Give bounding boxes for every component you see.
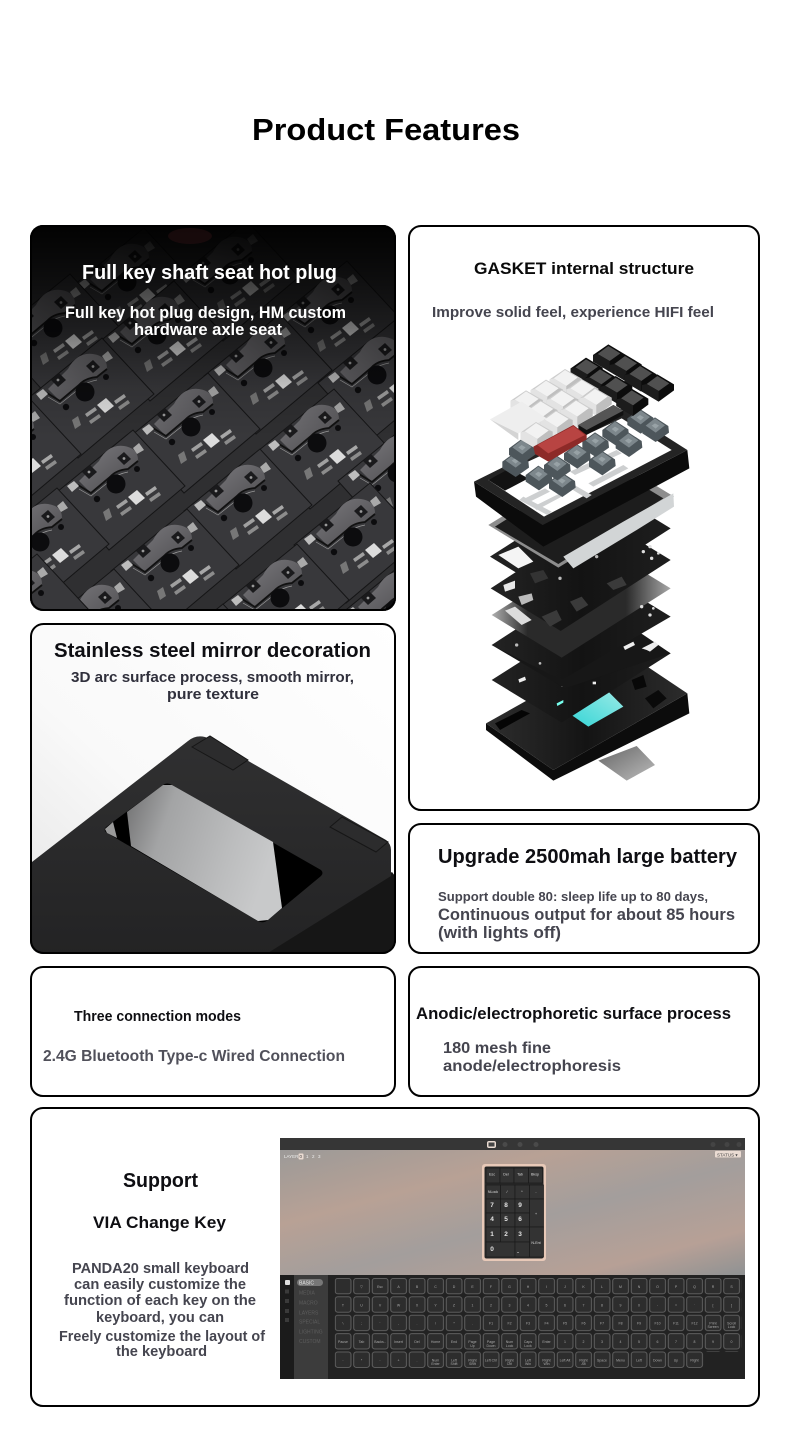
panel: hot plug shaft seat (30, 225, 396, 611)
keycode grid: J (564, 1285, 566, 1289)
keycode grid: Y (434, 1304, 437, 1308)
numpad preview: 9 (518, 1202, 522, 1209)
keycode grid: F10 (654, 1322, 661, 1326)
keycode grid: D (453, 1285, 456, 1289)
keycode grid: Win (525, 1362, 531, 1366)
keycode grid: 7 (583, 1304, 585, 1308)
numpad preview: - (535, 1190, 537, 1194)
numpad preview: 8 (504, 1202, 508, 1209)
keycode grid: M (619, 1285, 622, 1289)
numpad preview: 3 (518, 1231, 522, 1238)
numpad preview: 7 (490, 1202, 494, 1209)
keycode grid: Lock (506, 1344, 513, 1348)
numpad preview (482, 1164, 546, 1261)
keycode grid: F11 (673, 1322, 679, 1326)
keycode grid: Enter (431, 1362, 441, 1366)
text block: Full key hot plug design, HM custom (65, 303, 346, 322)
panel: stainless steel mirror (28, 623, 398, 956)
keycode grid: Q (693, 1285, 696, 1289)
text block (65, 303, 346, 339)
heading: Upgrade 2500mah large battery (438, 846, 738, 868)
layer selector: 0 (300, 1154, 302, 1159)
panel: surface process (409, 967, 759, 1096)
keycode grid: . (417, 1322, 418, 1326)
keycode grid: W (397, 1304, 401, 1308)
text block: Improve solid feel, experience HIFI feel (432, 305, 714, 321)
stacked plates (490, 486, 671, 723)
keycode grid: T (342, 1304, 345, 1308)
keycode grid: 8 (601, 1304, 603, 1308)
numpad preview: Esc (489, 1172, 495, 1176)
keycode grid: F9 (637, 1322, 641, 1326)
keycode grid: Enter (542, 1340, 552, 1344)
heading: Three connection modes (74, 1009, 241, 1025)
text block (71, 669, 354, 703)
sidebar (280, 1275, 328, 1379)
keycode grid: F7 (600, 1322, 604, 1326)
text block: 180 mesh fine (443, 1040, 551, 1057)
panel: VIA support (31, 1108, 759, 1406)
heading: Stainless steel mirror decoration (54, 640, 371, 662)
keycode grid: Left (636, 1358, 642, 1362)
sidebar: SPECIAL (299, 1320, 320, 1326)
keycode grid: G (508, 1285, 511, 1289)
text block (59, 1261, 265, 1360)
keycode grid: Ctrl (507, 1362, 512, 1366)
numpad preview: 2 (504, 1231, 508, 1238)
keycode grid: V (379, 1304, 382, 1308)
numpad preview: 6 (518, 1216, 522, 1223)
app canvas (280, 1150, 745, 1275)
text block: 2.4G Bluetooth Type-c Wired Connection (43, 1048, 345, 1065)
keycode grid: Del (414, 1340, 420, 1344)
panel: connection modes (31, 967, 395, 1096)
keycode grid: F (490, 1285, 492, 1289)
heading: Anodic/electrophoretic surface process (416, 1004, 731, 1023)
keycode grid: 8 (694, 1340, 696, 1344)
keycode grid: 9 (712, 1340, 714, 1344)
keycode grid: [ (713, 1304, 714, 1308)
keycode grid: Insert (394, 1340, 403, 1344)
keycode grid: 7 (675, 1340, 677, 1344)
keycode grid: ] (731, 1304, 732, 1308)
keycode grid: \ (343, 1322, 344, 1326)
layer selector: LAYER (284, 1154, 299, 1159)
switches (526, 466, 552, 490)
subheading: VIA Change Key (93, 1213, 227, 1232)
keycode grid (335, 1278, 744, 1371)
keycode grid: Lock (728, 1325, 735, 1329)
keycode grid: ▽ (360, 1285, 364, 1289)
keycode grid: H (527, 1285, 530, 1289)
app top bar (280, 1138, 745, 1150)
text block: hardware axle seat (134, 320, 282, 339)
keycode grid: Caps (524, 1340, 532, 1344)
frame (474, 450, 689, 547)
sidebar: LIGHTING (299, 1330, 323, 1336)
keycode grid: F2 (507, 1322, 512, 1326)
numpad preview: + (535, 1212, 537, 1216)
keycode grid: Right (579, 1358, 588, 1362)
title: Product Features (252, 112, 520, 147)
keycode grid: Left (525, 1358, 531, 1362)
status dropdown: STATUS ▾ (717, 1152, 738, 1157)
keycode grid: R (712, 1285, 715, 1289)
keycode grid: N (638, 1285, 641, 1289)
keycode grid: Right (505, 1358, 514, 1362)
keycode grid: K (582, 1285, 585, 1289)
keycode grid: 3 (509, 1304, 511, 1308)
heading: Support (123, 1170, 198, 1192)
keycode grid: Home (431, 1340, 440, 1344)
sidebar: MACRO (299, 1300, 318, 1306)
keycode grid: Up (674, 1358, 678, 1362)
keycode grid: - (342, 1358, 344, 1362)
keycode grid: Esc (377, 1285, 383, 1289)
text block: Continuous output for about 85 hours (438, 906, 735, 924)
numpad preview: * (521, 1190, 523, 1194)
layer selector: 1 (306, 1154, 309, 1159)
keycode grid: Z (453, 1304, 456, 1308)
heading: GASKET internal structure (474, 259, 694, 278)
text block (443, 1040, 621, 1075)
keycode grid: I (546, 1285, 547, 1289)
keycode grid: 4 (527, 1304, 529, 1308)
keycode grid: Down (487, 1344, 496, 1348)
panel: GASKET internal structure (409, 226, 759, 810)
keycode grid: 9 (620, 1304, 622, 1308)
image: PCB sockets (30, 225, 396, 611)
heading: Full key shaft seat hot plug (82, 262, 337, 284)
keycode grid: F1 (489, 1322, 493, 1326)
keycode grid: Down (653, 1358, 662, 1362)
keycode grid: F8 (618, 1322, 623, 1326)
layer selector (284, 1154, 321, 1160)
keycode grid: / (435, 1322, 436, 1326)
keycode grid: U (360, 1304, 363, 1308)
keycode grid: X (416, 1304, 419, 1308)
keycode grid: B (416, 1285, 419, 1289)
keycode grid: = (675, 1304, 677, 1308)
keycode grid: Backs.. (374, 1340, 386, 1344)
keycode grid: 0 (731, 1340, 733, 1344)
keycode grid: F12 (691, 1322, 698, 1326)
keycode grid: F5 (563, 1322, 567, 1326)
keycode grid: Num (432, 1358, 439, 1362)
keycaps (593, 344, 625, 372)
panel: battery (409, 824, 759, 953)
text block: pure texture (167, 686, 259, 703)
keycode grid: Up (470, 1344, 475, 1348)
keycode grid: 6 (564, 1304, 566, 1308)
keycode grid: Scroll (727, 1322, 736, 1326)
keycode grid: Screen (707, 1325, 719, 1329)
text block: Support double 80: sleep life up to 80 days, (438, 889, 708, 904)
keycode grid: . (417, 1358, 418, 1362)
keycode grid: Left Ctrl (485, 1358, 497, 1362)
sidebar: MEDIA (299, 1290, 316, 1296)
keycode grid: Win (543, 1362, 550, 1366)
keycode grid: Right (690, 1358, 699, 1362)
sidebar: LAYERS (299, 1310, 319, 1316)
numpad preview: . (517, 1248, 519, 1255)
numpad preview: Tab (517, 1172, 523, 1176)
keycode grid: 0 (638, 1304, 640, 1308)
keycode grid: ; (361, 1322, 362, 1326)
keycode grid: Menu (616, 1358, 625, 1362)
layer selector: 2 (312, 1154, 315, 1159)
keycode grid: , (398, 1322, 399, 1326)
keycode grid: Lock (524, 1344, 532, 1348)
numpad preview: 4 (490, 1216, 494, 1223)
keycode grid: P (675, 1285, 678, 1289)
keycode grid: Num (506, 1340, 513, 1344)
numpad preview: Del (503, 1172, 509, 1176)
numpad preview: / (506, 1190, 508, 1194)
sidebar: BASIC (299, 1280, 314, 1286)
text block: the keyboard (116, 1344, 207, 1360)
numpad preview: Bksp (531, 1172, 539, 1176)
keycode grid: Right (468, 1358, 477, 1362)
keycode grid: 6 (657, 1340, 659, 1344)
keycode grid: Page (487, 1340, 495, 1344)
numpad preview: 1 (490, 1231, 494, 1238)
keycode grid: Space (597, 1358, 607, 1362)
keycode grid: - (379, 1358, 381, 1362)
status dropdown (715, 1151, 741, 1158)
keycode grid: Left (451, 1358, 457, 1362)
numpad preview: NLock (488, 1190, 498, 1194)
image: mirror on keyboard case (28, 736, 398, 956)
keycode grid: Alt (581, 1362, 586, 1366)
screenshot: VIA app (280, 1138, 745, 1379)
keycode grid: Print (709, 1322, 717, 1326)
keycode grid: Right (542, 1358, 551, 1362)
keycode grid: End (451, 1340, 457, 1344)
keycode grid: ' (380, 1322, 381, 1326)
keycode grid: Pause (338, 1340, 348, 1344)
keycode grid: ` (694, 1304, 695, 1308)
keycode grid: F3 (526, 1322, 530, 1326)
text block: (with lights off) (438, 924, 561, 942)
sidebar: CUSTOM (299, 1339, 321, 1345)
keycode grid: C (434, 1285, 437, 1289)
keycode grid: 4 (620, 1340, 622, 1344)
numpad preview: N-Ent (531, 1241, 541, 1245)
keycode grid: L (601, 1285, 603, 1289)
numpad preview: 0 (490, 1246, 494, 1253)
keycode grid: - (657, 1304, 659, 1308)
keycode grid: 1 (472, 1304, 474, 1308)
keycode grid: Tab (359, 1340, 364, 1344)
text block (438, 889, 735, 942)
image: exploded keyboard (474, 344, 689, 781)
keycode grid: A (397, 1285, 400, 1289)
keycode grid: 5 (638, 1340, 640, 1344)
keycode grid: 5 (546, 1304, 548, 1308)
keycode grid: + (397, 1358, 400, 1362)
keycode grid: * (453, 1322, 455, 1326)
text block: can easily customize the (74, 1277, 246, 1293)
text block: function of each key on the (64, 1293, 256, 1309)
keycode grid: 2 (583, 1340, 585, 1344)
keycode grid: Left Alt (560, 1358, 570, 1362)
keycode grid: S (730, 1285, 733, 1289)
keycode grid: . (472, 1322, 473, 1326)
keycode grid: Page (468, 1340, 477, 1344)
text block: 3D arc surface process, smooth mirror, (71, 669, 354, 686)
keycode grid: E (471, 1285, 474, 1289)
keycode grid: 2 (490, 1304, 492, 1308)
layer selector: 3 (318, 1154, 321, 1159)
text block: keyboard, you can (96, 1310, 224, 1326)
text block: PANDA20 small keyboard (72, 1261, 249, 1277)
keycode grid: O (656, 1285, 659, 1289)
keycode grid: F4 (544, 1322, 549, 1326)
keycode grid: Shift (450, 1362, 458, 1366)
keycode grid: Shift (469, 1362, 476, 1366)
keycode grid: 3 (601, 1340, 603, 1344)
numpad preview: 5 (504, 1216, 508, 1223)
keycode grid: * (361, 1358, 363, 1362)
keycode grid: 1 (564, 1340, 566, 1344)
keycode grid: F6 (581, 1322, 586, 1326)
text block: anode/electrophoresis (443, 1058, 621, 1075)
text block: Freely customize the layout of (59, 1329, 265, 1345)
